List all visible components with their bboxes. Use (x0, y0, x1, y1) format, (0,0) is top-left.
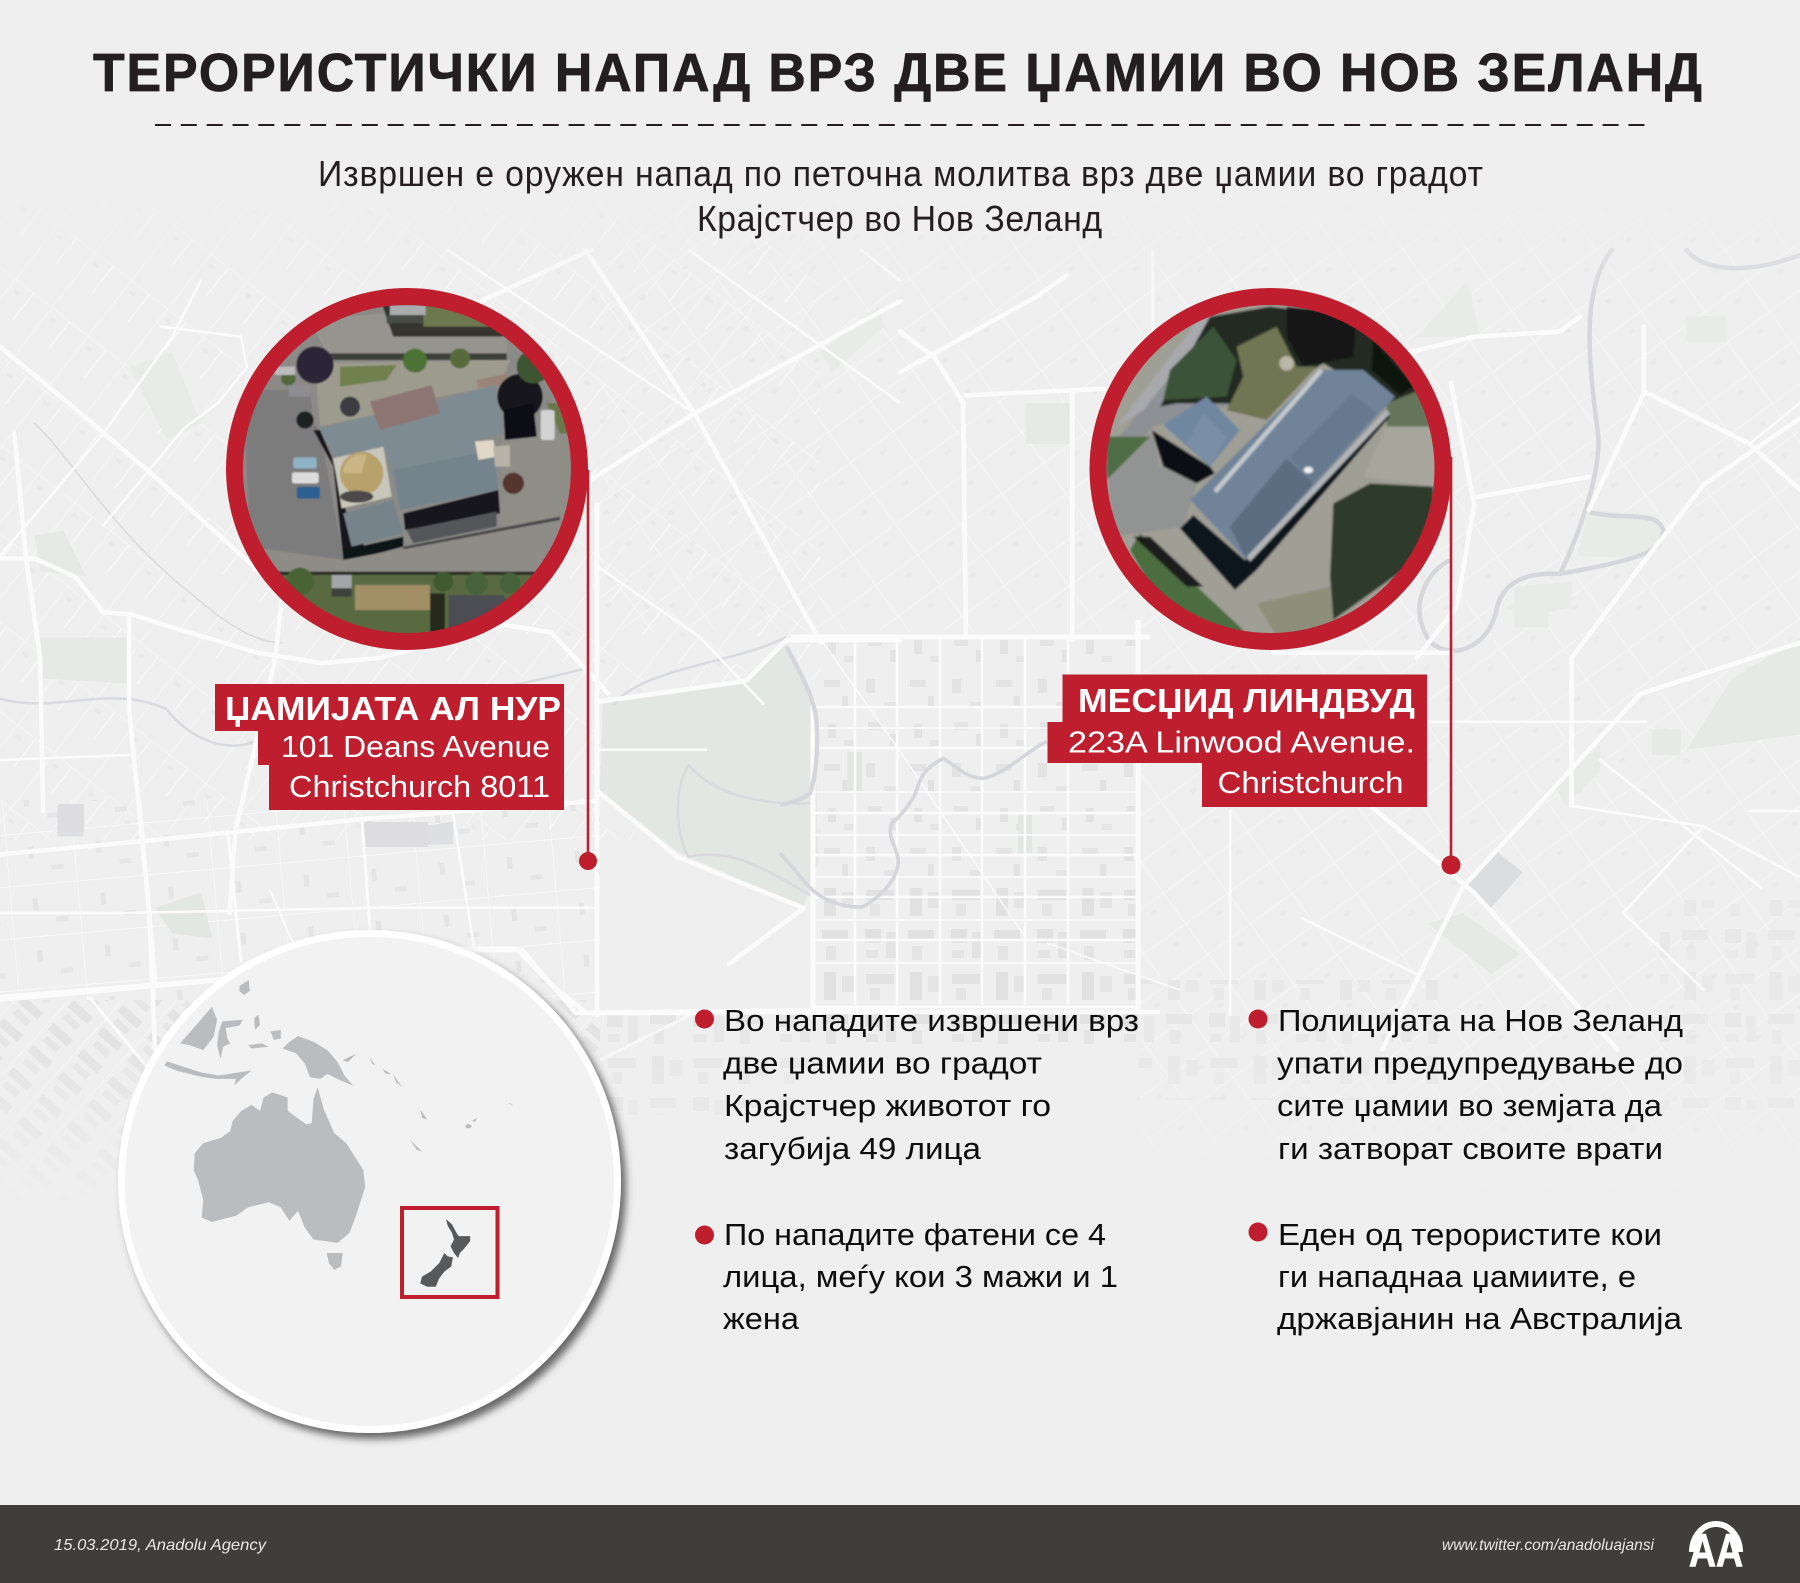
left dark buildings (58, 804, 428, 847)
label: Al Noor mosque: Christchurch 8011 (289, 769, 550, 804)
Linwood photo ring (1098, 296, 1443, 642)
title divider (155, 124, 1645, 126)
mosque photo ring (234, 296, 580, 642)
Australia (194, 1087, 365, 1243)
Indonesia and Papua New Guinea (164, 980, 513, 1152)
bullet: arrests: По нападите фатени се 4 (724, 1217, 1106, 1252)
label: Linwood mosque (1048, 674, 1427, 807)
Tasmania (327, 1253, 343, 1270)
bullet: casualties: загубија 49 лица (724, 1131, 982, 1166)
aerial photo: Linwood mosque (1083, 287, 1457, 653)
New Zealand (420, 1219, 470, 1287)
subtitle: Крајстчер во Нов Зеланд (697, 199, 1102, 239)
bullet: arrests (695, 1217, 1118, 1336)
icon: Anadolu Agency logo: AA (1689, 1524, 1743, 1576)
footer: 15.03.2019, Anadolu Agency (54, 1537, 267, 1554)
subtitle (318, 154, 1483, 239)
bullet: casualties: Во нападите извршени врз (724, 1003, 1139, 1038)
footer (0, 1505, 1800, 1583)
bullet: casualties (695, 1003, 1139, 1166)
left major roads (0, 800, 1160, 1067)
bullet: police warning: сите џамии во земјата да (1277, 1088, 1663, 1123)
label: Linwood mosque: МЕСЏИД ЛИНДВУД (1078, 682, 1415, 719)
bullet: police warning: упати предупредување до (1277, 1046, 1683, 1080)
bullet: police warning: ги затворат своите врати (1278, 1131, 1663, 1166)
bullet: terrorist nationality: Еден од терористите кои (1278, 1217, 1662, 1252)
title: ТЕРОРИСТИЧКИ НАПАД ВРЗ ДВЕ ЏАМИИ ВО НОВ ЗЕЛАНД (93, 43, 1702, 103)
label: Al Noor mosque: 101 Deans Avenue (281, 729, 550, 764)
bullet: terrorist nationality: државјанин на Австралија (1277, 1301, 1683, 1336)
label: Al Noor mosque: ЏАМИЈАТА АЛ НУР (225, 690, 561, 727)
callout: Al Noor mosque pointer (579, 470, 597, 870)
label: Linwood mosque: Christchurch (1218, 765, 1404, 800)
map fades (0, 170, 1800, 300)
callout: Linwood mosque pointer (1442, 457, 1460, 874)
aerial photo: Al Noor mosque (220, 287, 587, 653)
bullet: terrorist nationality (1248, 1217, 1683, 1336)
label: Linwood mosque: 223A Linwood Avenue. (1068, 724, 1415, 760)
bullet: arrests: жена (723, 1301, 800, 1336)
bullet: casualties: две џамии во градот (723, 1046, 1042, 1080)
left map (0, 250, 900, 1050)
central grid (780, 620, 1180, 1010)
bullet: casualties: Крајстчер животот го (724, 1088, 1051, 1123)
footer: www.twitter.com/anadoluajansi (1442, 1537, 1654, 1554)
bullet: police warning (1248, 1003, 1683, 1166)
locator map: Oceania (122, 934, 618, 1430)
right map (900, 250, 1800, 1050)
bullet: arrests: лица, меѓу кои 3 мажи и 1 (723, 1259, 1118, 1294)
bullet: police warning: Полицијата на Нов Зеланд (1278, 1003, 1683, 1038)
label: Al Noor mosque (215, 684, 564, 810)
bullet: terrorist nationality: ги нападнаа џамиите, е (1278, 1259, 1636, 1294)
New Zealand highlight box (402, 1208, 498, 1297)
subtitle: Извршен е оружен напад по петочна молитва врз две џамии во градот (318, 154, 1483, 194)
